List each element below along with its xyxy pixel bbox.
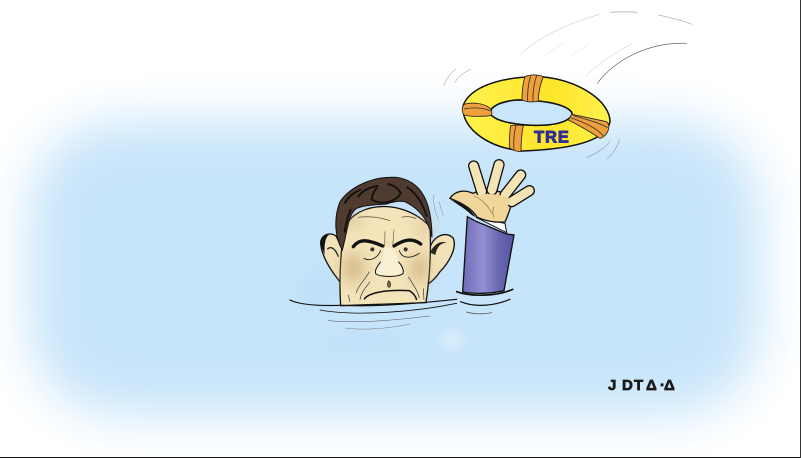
nose [375, 247, 403, 276]
face shading [343, 211, 428, 283]
band lines [464, 76, 608, 150]
ear: left [321, 234, 347, 283]
palm and thumb [454, 194, 511, 220]
ring hole [490, 100, 572, 125]
water surface lines [290, 195, 513, 329]
ring body [463, 77, 610, 151]
sleeve [463, 217, 514, 293]
brows and eyes [353, 217, 421, 260]
ear: right [428, 235, 454, 284]
figure: man sinking in water [290, 165, 529, 329]
hair [336, 177, 432, 250]
ring bands [462, 75, 609, 152]
signature: JDTΔ·Δ [608, 377, 675, 394]
eye pupils [370, 247, 408, 251]
lifebuoy ring with motion lines [444, 12, 692, 159]
mouth [364, 290, 417, 300]
cuff [476, 217, 507, 233]
hand [450, 165, 529, 222]
motion lines [444, 12, 692, 159]
ring label: TRE [534, 128, 570, 146]
face [340, 207, 430, 306]
wrinkles [348, 272, 424, 302]
hair strands [345, 184, 427, 232]
